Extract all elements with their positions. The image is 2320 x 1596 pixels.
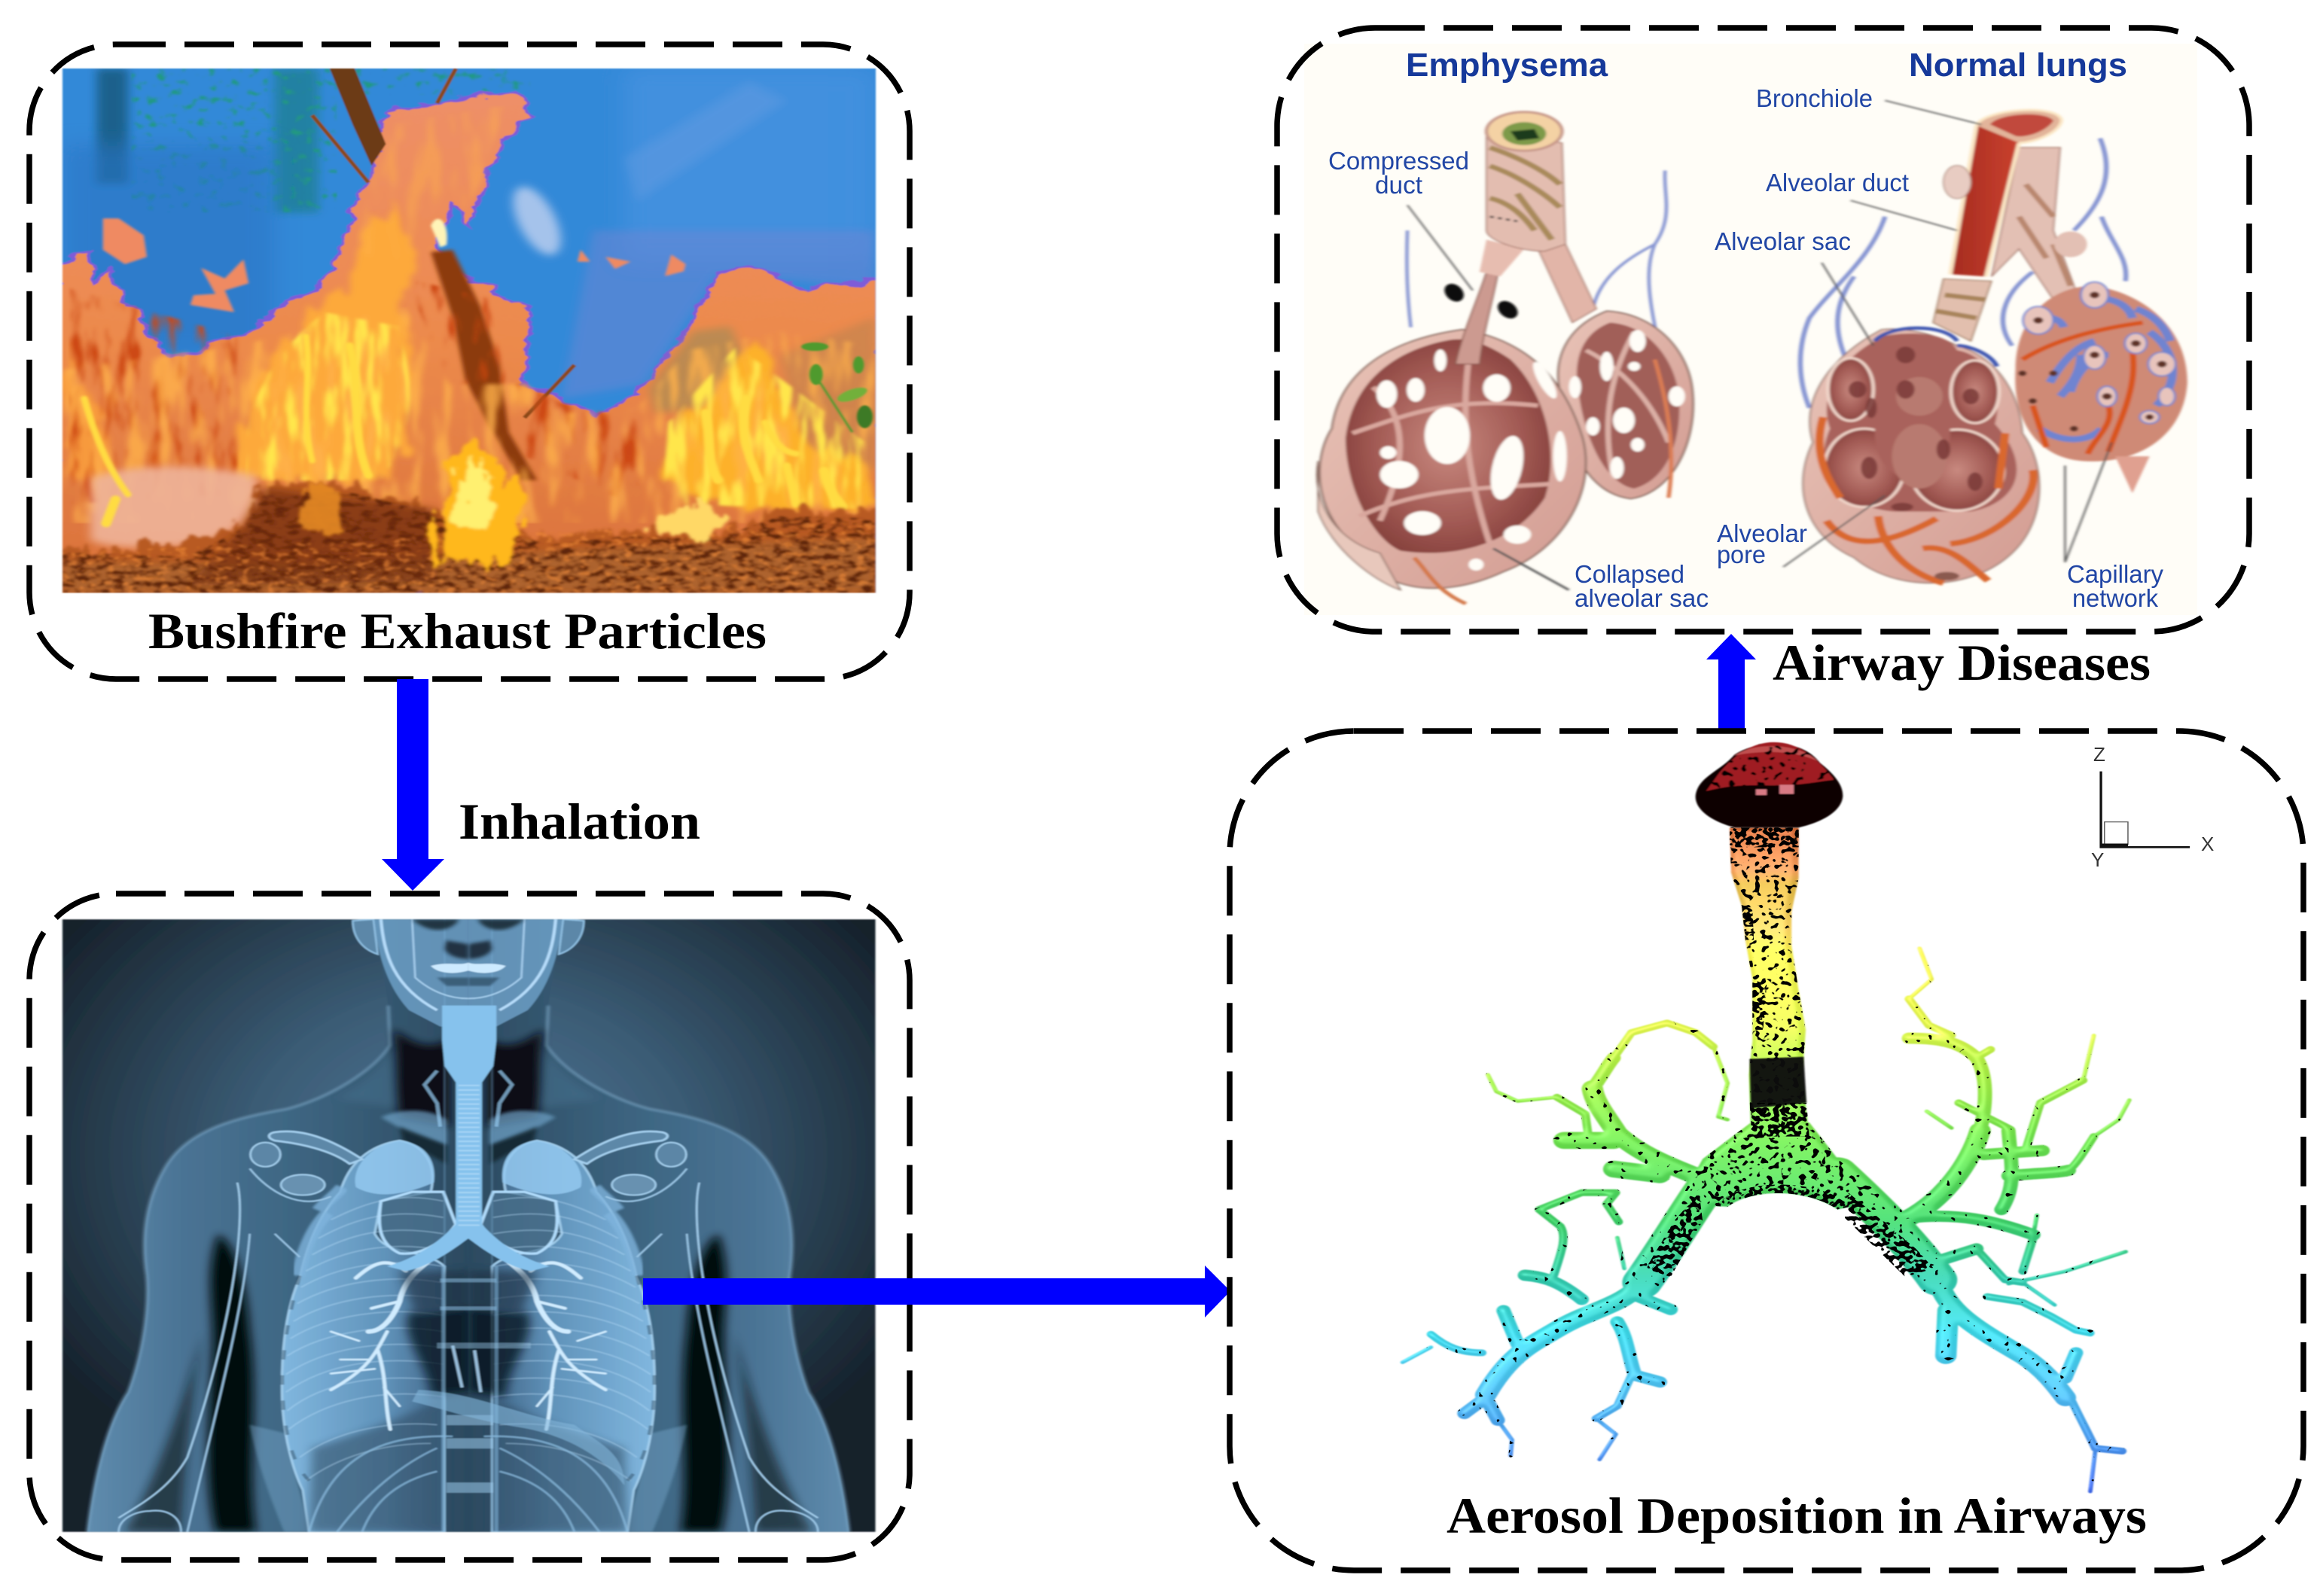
tree trunk [312,69,575,480]
axis labels [2091,743,2214,871]
caption: aerosol deposition in airways: Aerosol Deposition in Airways [1447,1487,2147,1544]
airway tree with deposited particles [1403,742,2190,1491]
heavy deposition band [1646,827,1934,1277]
dashed frame [29,894,910,1560]
illustration labels [1328,47,2163,612]
capillary network [2015,282,2187,493]
illustration labels: alveolar sac [1575,584,1709,612]
x-ray photo [62,919,876,1532]
normal alveoli [1800,110,2126,583]
axis labels: Y [2091,848,2104,871]
dashed frame [1277,28,2249,632]
arrow: inhalation downward [382,679,444,891]
illustration labels: Capillary [2067,560,2163,588]
leader lines [1407,100,2111,590]
trachea and spine [387,1006,624,1532]
deposited particles sparse [1403,827,2129,1491]
axis labels: X [2201,833,2214,855]
bushfire photo [50,69,886,600]
oral cavity head [1696,742,1843,827]
illustration labels: pore [1717,541,1766,568]
green leaves [801,343,873,432]
illustration labels: Emphysema [1406,47,1608,84]
axis triad [2101,772,2190,847]
axis labels: Z [2093,743,2105,766]
illustration labels: Collapsed [1575,560,1684,588]
illustration labels: Alveolar [1717,519,1807,547]
panel: human chest x-ray [29,894,910,1560]
airway tubes [1403,827,2129,1491]
arrow: lungs to airways [643,1266,1230,1317]
panel: bushfire exhaust particles [29,44,910,679]
arrow: airways to disease upward [1706,634,1756,732]
illustration labels: Bronchiole [1756,84,1873,112]
caption: airway diseases: Airway Diseases [1773,634,2151,691]
burning ground litter [50,485,886,600]
illustration labels: Alveolar sac [1715,227,1851,255]
dashed frame [1230,731,2303,1570]
panel: aerosol deposition in airways [1403,742,2214,1491]
deposited particles dense zone [1642,827,1937,1283]
illustration labels: network [2072,584,2158,612]
caption: bushfire exhaust particles: Bushfire Exhaust Particles [148,602,767,659]
flame islands [103,218,685,312]
label: inhalation: Inhalation [459,793,700,850]
dashed frame [29,44,910,679]
illustration labels: Alveolar duct [1766,169,1909,196]
illustration labels: duct [1375,171,1422,199]
panel: airway diseases [1277,28,2249,691]
illustration labels: Compressed [1328,147,1469,175]
alveoli illustration [1304,44,2197,615]
bright flame bases [300,434,724,569]
illustration labels: Normal lungs [1909,47,2127,84]
flame tongues [84,336,843,523]
emphysema alveoli [1317,112,1694,604]
main flame silhouette [56,91,880,595]
yellow flame cores [66,202,871,509]
